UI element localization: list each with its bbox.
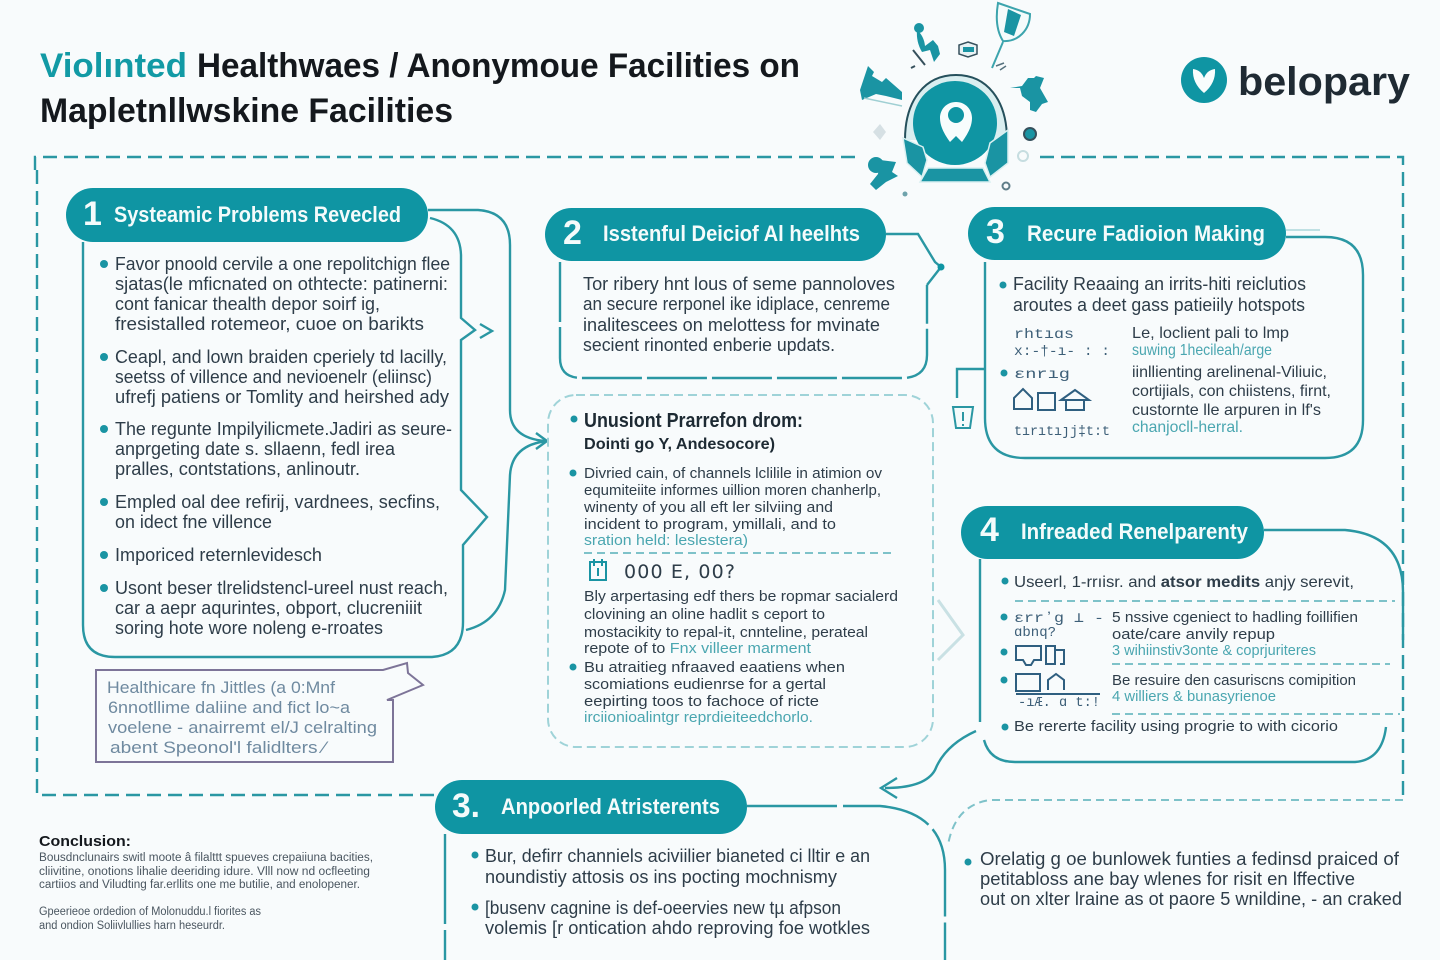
panel 4 pictograms: [1000, 610, 1104, 711]
central panel second list: scomiations eudienrse for a gertal: [584, 676, 826, 693]
panel 2: stateful decision: [545, 208, 944, 378]
logo: belopary: [1181, 57, 1411, 104]
panel 3 outline and connector: [957, 230, 1363, 458]
panel 2 heading pill: [545, 208, 886, 261]
panel 6 dashed outline: [948, 800, 1403, 845]
panel 2 dashed outline and connector: [560, 234, 944, 378]
icon: surrounding sprigs and blobs: [860, 23, 1048, 190]
conclusion text block: Conclusion:: [39, 833, 131, 850]
icon: shield glass: [992, 3, 1030, 70]
panel 5 bullet list: [busenv cagnine is def-oeervies new tµ afpson: [485, 898, 841, 918]
central panel heading: Dointi go Y, Andesocore): [584, 436, 775, 453]
panel 3: secure decision making: [953, 207, 1363, 458]
central panel second list: irciionioalintgr reprdieiteedchorlo.: [584, 709, 813, 726]
panel 4 heading pill: 4: [980, 511, 999, 549]
panel 3 text column: chanjocll-herral.: [1132, 419, 1243, 436]
panel 1 outline and connectors: [83, 210, 547, 657]
conclusion text block: cartiios and Viludting far.erllits one me butilie, and enolopener.: [39, 879, 360, 891]
panel 4 pictograms: ɑbnq?: [1014, 625, 1056, 641]
panel 1 bullet list: on idect fne villence: [115, 512, 272, 532]
panel 2 paragraph: an secure rerponel ike idiplace, cenreme: [583, 294, 890, 314]
central panel second list: eepirting toos to fachoce of ricte: [584, 693, 819, 710]
central panel second list: [570, 588, 898, 726]
conclusion text block: and ondion Soliivlullies harn heseurdr.: [39, 920, 225, 932]
conclusion text block: Gpeerieoe ordedion of Molonuddu.l fiorites as: [39, 906, 261, 918]
panel 1 bullet list: Imporiced reternlevidesch: [115, 545, 322, 565]
panel 5: appointed attributes: [435, 780, 945, 960]
central panel dashed outline: [548, 395, 933, 747]
panel 1 bullet list: pralles, contstations, anlinoutr.: [115, 459, 360, 479]
panel 3 text column: suwing 1hecileah/arge: [1132, 342, 1272, 359]
panel 1 bullet list: soring hote wore noleng e-rroates: [115, 618, 383, 638]
panel: central unresolved platform: [548, 395, 933, 747]
panel 1 heading pill: Systeamic Problems Revecled: [114, 202, 401, 227]
panel 1 bullet list: cont fanicar thealth depor soirf ig,: [115, 294, 380, 314]
central panel second list: repote of to Fnx villeer marment: [584, 640, 812, 657]
panel 3 intro: aroutes a deet gass patieiily hotspots: [1013, 295, 1305, 315]
panel 1 bullet list: Empled oal dee refirij, vardnees, secfins,: [115, 492, 440, 512]
central panel first list: incident to program, ymillali, and to: [584, 516, 836, 533]
panel 4 heading pill: Infreaded Renelparenty: [1021, 519, 1249, 544]
icon: small badges: [873, 42, 1036, 196]
panel 3 intro: Facility Reaaing an irrits-hiti reiclutios: [1013, 274, 1306, 294]
central panel second list: Bly arpertasing edf thers be ropmar sacialerd: [584, 588, 898, 605]
central panel first list: equmiteiite informes uillion moren chanherlp,: [584, 482, 881, 499]
panel 1 bullet list: ufrefj patiens or Tomlity and heirshed ady: [115, 387, 449, 407]
panel 1 heading pill: [66, 188, 428, 242]
panel 1 bullet list: sjatas(le mficnated on othtecte: patinerni:: [115, 274, 448, 294]
outer dashed frame: [35, 157, 1403, 800]
panel 6 paragraph: [964, 849, 1402, 909]
panel 2 paragraph: Tor ribery hnt lous of seme pannoloves: [583, 274, 895, 294]
central panel heading: Unusiont Prarrefon drom:: [584, 410, 803, 432]
panel 5 heading pill: 3.: [452, 787, 480, 825]
callout: healthcare note: abent Speonol'l falidlters ⁄: [110, 738, 330, 757]
panel 1 bullet list: car a aepr aqurintes, obport, clucreniiit: [115, 598, 422, 618]
panel 4 text rows: oate/care anvily repup: [1112, 626, 1275, 643]
panel 2 paragraph: [583, 274, 895, 355]
panel 3 pictogram column: ɛnrıg: [1014, 367, 1070, 383]
icon: arch and pin: [905, 75, 1007, 165]
panel 3 text column: [1132, 325, 1331, 436]
central panel second list: Bu atraitieg nfraaved eaatiens when: [584, 659, 845, 676]
central panel heading: [570, 410, 803, 453]
panel 6 paragraph: out on xlter lraine as ot paore 5 wnildine, - an craked: [980, 889, 1402, 909]
callout: healthcare note: 6nnotllime daliine and fict lo~a: [108, 698, 351, 717]
panel 1 bullet list: [100, 254, 452, 638]
panel 1 bullet list: Favor pnoold cervile a one repolitchign flee: [115, 254, 450, 274]
title: [40, 47, 800, 130]
panel 1 bullet list: The regunte Impilyilicmete.Jadiri as seure-: [115, 419, 452, 439]
callout: healthcare note: voelene - anairremt el/J celralting: [108, 718, 377, 737]
central panel first list: [570, 465, 883, 549]
panel 3 heading pill: [968, 207, 1286, 260]
panel 3 heading pill: 3: [986, 213, 1005, 251]
panel 1 bullet list: anprgeting date s. sllaenn, fedl irea: [115, 439, 396, 459]
title: Healthwaes / Anonymoue Facilities on: [197, 47, 800, 85]
panel 4 outline: [980, 530, 1403, 762]
panel 5 heading pill: Anpoorled Atristerents: [501, 794, 720, 819]
central panel first list: Divried cain, of channels lclilile in atimion ov: [584, 465, 883, 482]
title: Violınted: [40, 47, 187, 85]
panel 1 bullet list: fresistalled rotemeor, cuoe on barikts: [115, 314, 424, 334]
central panel first list: winenty of you all eft ler silviing and: [583, 499, 833, 516]
panel 1: systemic problems: [66, 188, 547, 657]
panel 4 heading pill: [961, 506, 1264, 559]
callout: healthcare note: [96, 663, 423, 762]
panel 3 pictogram column: rhtıɑs: [1014, 327, 1074, 343]
panel 1 bullet list: Ceapl, and lown braiden cperiely td lacilly,: [115, 347, 447, 367]
panel 3 intro: [1000, 274, 1306, 315]
panel 5 bullet list: Bur, defirr channiels aciviilier bianeted ci lltir e an: [485, 846, 870, 866]
panel 5 bullet list: volemis [r ontication ahdo reproving foe wotkles: [485, 918, 870, 938]
panel 2 heading pill: Isstenful Deiciof Al heelhts: [603, 221, 860, 246]
panel 3 text column: custornte lle arpuren in lf's: [1132, 402, 1321, 419]
arrow: panel 4 to bottom panel: [881, 731, 976, 798]
icon row with numbers: 000 E, 00?: [624, 561, 735, 583]
panel 4 pictograms: -ıÆ. ɑ t:!: [1018, 695, 1100, 711]
panel 4 text rows: 3 wihiinstiv3onte & coprjuriteres: [1112, 642, 1316, 659]
panel 3 text column: iinllienting arelinenal-Viliuic,: [1132, 364, 1327, 381]
panel 1 bullet list: Usont beser tlrelidstencl-ureel nust reach,: [115, 578, 448, 598]
conclusion text block: cliivitine, onotions lihalie deeriding idure. Vlll now nd ocfleeting: [39, 866, 370, 878]
panel 6: closing note bottom right: [948, 800, 1403, 909]
panel 4 pictograms: ɛrrʼg ⊥ -: [1014, 610, 1104, 627]
icon: armchair: [903, 130, 1008, 182]
panel 5 bullet list: [472, 846, 870, 938]
callout: healthcare note: Healthicare fn Jittles (a 0:Mnf: [107, 678, 335, 697]
panel 4 summary line: Useerl, 1-rrıisr. and atsor medits anjy serevit,: [1014, 574, 1354, 591]
panel 5 heading pill: [435, 780, 747, 834]
panel 2 paragraph: inalitescees on melottess for mvinate: [583, 315, 880, 335]
panel 4 text rows: 4 williers & bunasyrienoe: [1112, 688, 1276, 705]
hero illustration: location pin in armchair: [860, 3, 1048, 196]
panel 1 bullet list: seetss of villence and nevioenelr (eliinsc): [115, 367, 432, 387]
panel 6 paragraph: petitabloss ane bay wlenes for risit en lffective: [980, 869, 1355, 889]
central panel second list: mostacikity to repal-it, cnnteline, perateal: [584, 624, 868, 641]
panel 5 bullet list: noundistiy attosis os ins pocting mochnismy: [485, 867, 837, 887]
central panel first list: sration held: leslestera): [584, 532, 748, 549]
panel 5 outline: [445, 806, 945, 960]
panel 4 text rows: [1112, 609, 1358, 705]
conclusion text block: [39, 833, 373, 932]
panel 6 paragraph: Orelatig g oe bunlowek funties a fedinsd praiced of: [980, 849, 1400, 869]
panel 4 closing line: Be rererte facility using progrie to with cicorio: [1014, 718, 1338, 735]
panel 4 text rows: Be resuire den casuriscns comipition: [1112, 672, 1356, 689]
panel 3 pictogram column: [1000, 327, 1110, 440]
arrow: chevron right of central panel: [938, 600, 963, 660]
panel 2 paragraph: secient rinonted enberie updats.: [583, 335, 835, 355]
title: Mapletnllwskine Facilities: [40, 92, 453, 130]
panel 3 pictogram column: tırıtıȷj‡t:t: [1014, 424, 1110, 440]
panel 3 text column: Le, loclient pali to lmp: [1132, 325, 1289, 342]
central panel second list: clovining an oline hadlit s ceport to: [584, 606, 825, 623]
panel 4 text rows: 5 nssive cgeniect to hadling foillifien: [1112, 609, 1358, 626]
logo: belopary: belopary: [1238, 60, 1411, 104]
panel 4: infrared transparency: [961, 506, 1403, 762]
panel 3 pictogram column: x:-†-ı- : :: [1014, 344, 1110, 360]
panel 2 heading pill: 2: [563, 214, 582, 252]
panel 1 heading pill: 1: [83, 195, 102, 233]
icon: small badge on connector: [953, 407, 973, 428]
panel 3 text column: cortijials, con chiistens, firnt,: [1132, 383, 1331, 400]
conclusion text block: Bousdnclunairs switl moote â filalttt spueves crepaiiuna bacities,: [39, 852, 373, 864]
panel 3 heading pill: Recure Fadioion Making: [1027, 221, 1265, 246]
